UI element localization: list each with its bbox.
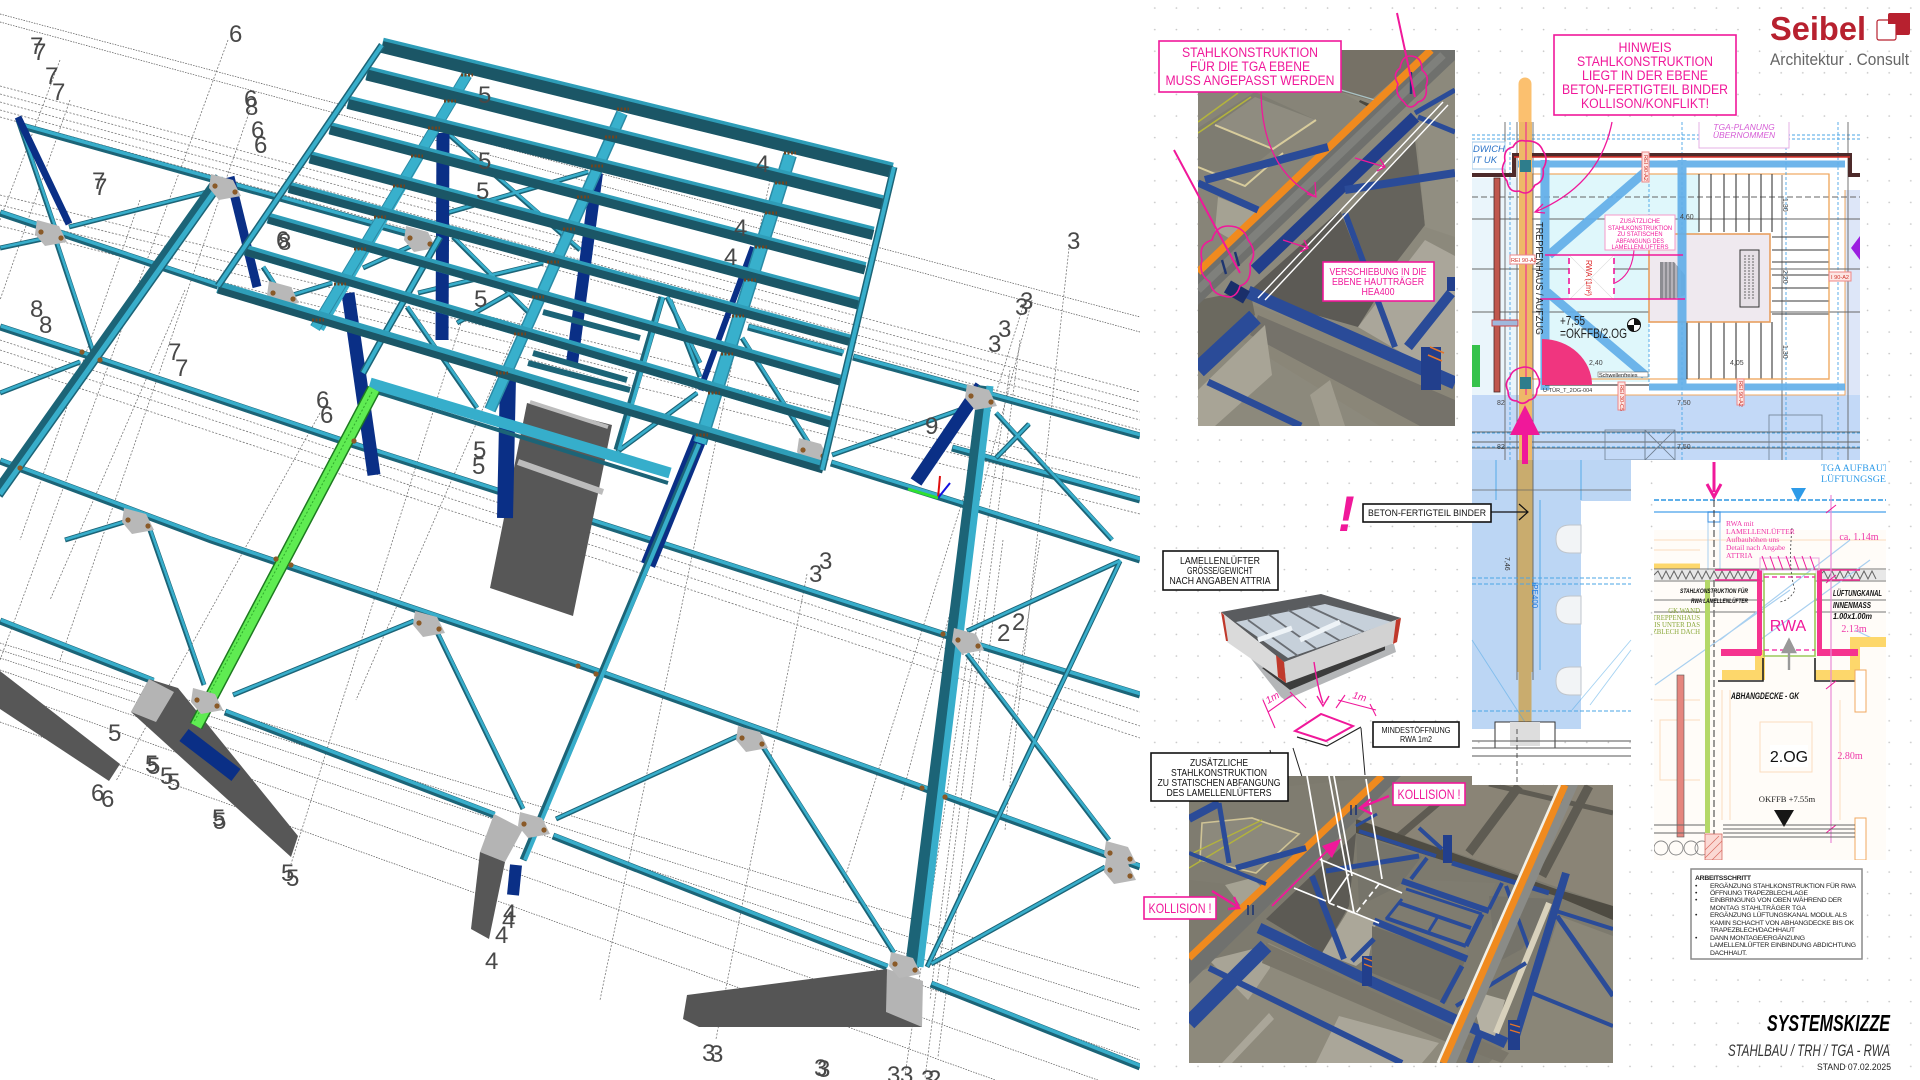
text block: Arbeitsschritt: • bbox=[1695, 912, 1698, 919]
shaft walls bbox=[1266, 833, 1356, 953]
callout: Beton-Fertigteil Binder: BETON-FERTIGTEIL BINDER bbox=[1368, 508, 1486, 519]
main rafters bbox=[0, 178, 990, 967]
pink arrow to binder bbox=[1515, 412, 1535, 464]
floor plan: stairwell: 2,40 bbox=[1589, 360, 1603, 367]
sandwich tag bbox=[1472, 142, 1505, 169]
text block: Arbeitsschritt: ÖFFNUNG TRAPEZBLECHLAGE bbox=[1710, 889, 1808, 897]
grid axis numbers: 8 bbox=[39, 312, 52, 339]
grid axis numbers: 3 bbox=[710, 1041, 723, 1068]
text block: Arbeitsschritt: • bbox=[1695, 890, 1698, 897]
gusset plates bbox=[17, 174, 1136, 978]
grid axis numbers: 5 bbox=[108, 720, 121, 747]
callout: Verschiebung: VERSCHIEBUNG IN DIE bbox=[1330, 266, 1426, 278]
logo: Seibel: Seibel bbox=[1770, 10, 1866, 47]
callout: Hinweis bbox=[1554, 35, 1736, 115]
section drawing RWA: RWA mit bbox=[1726, 519, 1755, 528]
grid axis numbers: 8 bbox=[30, 296, 43, 323]
callout: Mindestöffnung: MINDESTÖFFNUNG bbox=[1382, 725, 1451, 735]
floor plan: stairwell: RWA (1m²) bbox=[1584, 260, 1593, 296]
grid axis numbers: 5 bbox=[213, 808, 226, 835]
callout: Mindestöffnung bbox=[1373, 722, 1459, 747]
section drawing RWA: BIS UNTER DAS bbox=[1650, 622, 1700, 629]
render: top 3D view of steel in shaft bbox=[1174, 13, 1455, 426]
grid axis numbers: 4 bbox=[724, 244, 737, 271]
section drawing RWA: 2.80m bbox=[1837, 751, 1863, 762]
green highlighted member bbox=[194, 389, 374, 726]
grid axis numbers: 4 bbox=[502, 907, 515, 934]
lower plan: binder elevation bbox=[1472, 460, 1631, 784]
grid axis numbers: 5 bbox=[286, 865, 299, 892]
concrete core bbox=[490, 402, 612, 616]
text block: Arbeitsschritt: ERGÄNZUNG LÜFTUNGSKANAL MODUL ALS bbox=[1710, 911, 1847, 919]
section drawing RWA: Detail nach Angabe bbox=[1726, 543, 1786, 552]
callout: Zusätzliche Stahlkonstruktion (plan) bbox=[1605, 215, 1675, 251]
section drawing RWA: RWA LAMELLENLÜFTER bbox=[1691, 596, 1748, 605]
grid axis numbers: 7 bbox=[94, 174, 107, 201]
floor plan: stairwell: DWICH bbox=[1473, 143, 1505, 154]
text block: Arbeitsschritt: DANN MONTAGE/ERGÄNZUNG bbox=[1710, 934, 1805, 942]
truss lattice members bbox=[0, 120, 1120, 967]
floor plan: stairwell: 82 bbox=[1497, 444, 1505, 451]
lower plan boxes bbox=[1605, 415, 1822, 465]
sketch: minimum opening: 1m bbox=[1351, 690, 1368, 704]
section drawing RWA: 2.OG bbox=[1770, 749, 1808, 766]
walls bbox=[1472, 155, 1860, 175]
annotation clouds and arrows bbox=[1174, 13, 1427, 297]
floor plan: stairwell: +7,55 bbox=[1560, 313, 1585, 328]
callout: Zusätzliche Stahlkonstruktion: STAHLKONSTRUKTION bbox=[1171, 768, 1267, 779]
callout: Stahlkonstruktion TGA Ebene: FÜR DIE TGA EBENE bbox=[1190, 59, 1310, 74]
section drawing RWA: ABHANGDECKE - GK bbox=[1730, 691, 1800, 702]
plan labels: TREPPENHAUS / AUFZUG bbox=[1533, 222, 1544, 335]
sketch: minimum opening: 1m bbox=[1264, 690, 1282, 707]
section drawing RWA: 2.13m bbox=[1841, 624, 1867, 635]
floor plan: stairwell: 1,30 bbox=[1781, 198, 1788, 212]
section drawing RWA: OKFFB +7.55m bbox=[1759, 794, 1816, 804]
steel beam bbox=[1189, 776, 1401, 984]
grid axis numbers: 6 bbox=[320, 402, 333, 429]
blue columns bbox=[18, 117, 981, 565]
grid axis numbers: 5 bbox=[478, 148, 491, 175]
door swing bbox=[1542, 339, 1592, 385]
grid axis numbers: 3 bbox=[1015, 294, 1028, 321]
text block: Arbeitsschritt bbox=[1691, 869, 1862, 959]
callout: Kollision top bbox=[1393, 783, 1465, 805]
grid axis numbers: 5 bbox=[478, 82, 491, 109]
callout: Zusätzliche Stahlkonstruktion: ZU STATISCHEN ABFANGUNG bbox=[1158, 778, 1280, 789]
grid axis numbers: 4 bbox=[485, 948, 498, 975]
small room tags: REI 30-C5 bbox=[1618, 385, 1624, 411]
roof platform: purlins bbox=[218, 45, 894, 470]
shaft walls bbox=[1245, 210, 1375, 327]
floor plan: stairwell: 2,20 bbox=[1781, 270, 1788, 284]
callout: Hinweis: STAHLKONSTRUKTION bbox=[1577, 54, 1713, 69]
callout: Lamellenlüfter: GRÖSSE/GEWICHT bbox=[1187, 566, 1253, 577]
logo: Seibel: Architektur . Consult bbox=[1770, 50, 1909, 69]
grid axis numbers: 6 bbox=[91, 780, 104, 807]
callout: Zusätzliche Stahlkonstruktion (plan): ZUSÄTZLICHE bbox=[1620, 217, 1660, 225]
grid lines bbox=[1472, 122, 1860, 460]
text block: Arbeitsschritt: • bbox=[1695, 883, 1698, 890]
blue members bbox=[1189, 803, 1613, 1063]
floor plan: stairwell: 4,05 bbox=[1730, 360, 1744, 367]
grid axis numbers: 6 bbox=[244, 86, 257, 113]
grid axis numbers: 6 bbox=[251, 117, 264, 144]
section drawing RWA: ca. 1.14m bbox=[1839, 532, 1879, 543]
callout: Stahlkonstruktion TGA Ebene: MUSS ANGEPASST WERDEN bbox=[1166, 73, 1334, 88]
exclamation mark: ! bbox=[1338, 486, 1355, 542]
blue members bbox=[1198, 90, 1455, 426]
grid axis numbers: 5 bbox=[476, 178, 489, 205]
lower plan: binder elevation: IPE400 bbox=[1530, 582, 1539, 609]
small room tags: REI 90-A2 bbox=[1642, 155, 1648, 181]
grid axis numbers: 7 bbox=[92, 168, 105, 195]
steel beams bbox=[1518, 160, 1845, 390]
grid axis numbers: 7 bbox=[30, 33, 43, 60]
grid axis numbers: 8 bbox=[245, 94, 258, 121]
orange stripe right bbox=[1446, 785, 1578, 1063]
callout: Hinweis: LIEGT IN DER EBENE bbox=[1582, 68, 1708, 83]
callout: Kollision left: KOLLISION ! bbox=[1148, 900, 1212, 916]
pink frame and green duct bbox=[1721, 649, 1761, 656]
callout: Verschiebung: HEA400 bbox=[1362, 286, 1395, 298]
text block: Arbeitsschritt: ARBEITSSCHRITT bbox=[1695, 875, 1752, 882]
grid axis numbers: 6 bbox=[229, 21, 242, 48]
roof platform: secondary beams bbox=[315, 75, 790, 450]
date stamp: STAND 07.02.2025 bbox=[1817, 1062, 1891, 1073]
section drawing RWA: STAHLKONSTRUKTION FÜR bbox=[1680, 586, 1748, 595]
product image: louvre ventilator bbox=[1221, 594, 1401, 700]
callout: Verschiebung bbox=[1323, 262, 1434, 301]
callout: Zusätzliche Stahlkonstruktion: DES LAMELLENLÜFTERS bbox=[1166, 787, 1272, 799]
section drawing RWA: Aufbauhöhen uns bbox=[1726, 535, 1779, 544]
floor plan: stairwell bbox=[1472, 84, 1860, 465]
callout: Hinweis: BETON-FERTIGTEIL BINDER bbox=[1562, 82, 1728, 97]
callout: Hinweis: KOLLISON/KONFLIKT! bbox=[1581, 96, 1709, 111]
grid axis numbers: 7 bbox=[33, 39, 46, 66]
callout: Kollision left bbox=[1144, 897, 1216, 919]
callout: Zusätzliche Stahlkonstruktion: ZUSÄTZLICHE bbox=[1190, 757, 1248, 769]
grid axis numbers: 3 bbox=[1067, 228, 1080, 255]
grid axis numbers: 7 bbox=[52, 79, 65, 106]
callout: Hinweis: HINWEIS bbox=[1618, 40, 1672, 55]
callout: Zusätzliche Stahlkonstruktion (plan): ABFANGUNG DES bbox=[1616, 238, 1664, 245]
grid axis numbers: 4 bbox=[503, 900, 516, 927]
grid axis numbers: 5 bbox=[212, 805, 225, 832]
grid axis numbers: 5 bbox=[472, 453, 485, 480]
grid axis lines bbox=[0, 14, 1140, 1080]
grid axis numbers: 4 bbox=[734, 215, 747, 242]
grid axis numbers: 5 bbox=[281, 860, 294, 887]
grid axis numbers: 5 bbox=[473, 437, 486, 464]
grid axis numbers: 5 bbox=[145, 751, 158, 778]
lower plan: binder elevation: 7,46 bbox=[1503, 557, 1510, 571]
TGA-Planung tag bbox=[1698, 122, 1790, 148]
section drawing RWA: TRAPEZBLECH DACH bbox=[1631, 629, 1700, 636]
text block: Arbeitsschritt: TRAPEZBLECH/DACHHAUT bbox=[1710, 927, 1795, 934]
callout: Zusätzliche Stahlkonstruktion bbox=[1151, 753, 1288, 801]
grid axis numbers: 7 bbox=[168, 339, 181, 366]
section drawing RWA bbox=[1654, 460, 1886, 860]
section drawing RWA: ATTRIA bbox=[1726, 551, 1753, 560]
floor plan: stairwell: Schwellenfreies bbox=[1599, 373, 1638, 379]
render: lower 3D view with RWA wireframe bbox=[1189, 776, 1613, 1063]
floor plan: stairwell: 1,30 bbox=[1781, 345, 1788, 359]
white wireframe bbox=[1294, 776, 1402, 923]
section drawing RWA: LÜFTUNGSGE bbox=[1821, 473, 1886, 485]
text block: Arbeitsschritt: ERGÄNZUNG STAHLKONSTRUKTION FÜR RWA bbox=[1710, 882, 1856, 890]
text block: Arbeitsschritt: DACHHAUT. bbox=[1710, 950, 1747, 957]
callout: Verschiebung: EBENE HAUTTRÄGER bbox=[1332, 276, 1424, 288]
floor plan: stairwell: =OKFFB/2.OG bbox=[1560, 325, 1627, 341]
text block: Arbeitsschritt: LAMELLENLÜFTER EINBINDUNG ABDICHTUNG bbox=[1710, 941, 1856, 949]
floor plan: stairwell: IT UK bbox=[1473, 154, 1498, 165]
grid axis numbers: 3 bbox=[702, 1040, 715, 1067]
floor plan: stairwell: U-TÜR_T_2OG-004 bbox=[1543, 387, 1592, 394]
logo: Seibel bbox=[1770, 10, 1910, 69]
grid axis numbers: 6 bbox=[101, 786, 114, 813]
roof surface bbox=[1356, 776, 1613, 906]
grid axis numbers: 5 bbox=[474, 286, 487, 313]
floor plan: stairwell: TGA-PLANUNG bbox=[1713, 122, 1775, 132]
grid axis numbers: 5 bbox=[167, 769, 180, 796]
grid axis numbers: 2 bbox=[997, 620, 1010, 647]
floor plan: stairwell: 7,50 bbox=[1677, 444, 1691, 451]
grid axis numbers: 5 bbox=[160, 763, 173, 790]
text block: Arbeitsschritt: • bbox=[1695, 935, 1698, 942]
text block: Arbeitsschritt: EINBRINGUNG VON OBEN WÄHREND DER bbox=[1710, 896, 1842, 904]
opening RWA bbox=[1569, 255, 1614, 300]
concrete supports bbox=[0, 671, 923, 1027]
yellow insulation bbox=[1654, 566, 1886, 675]
grid axis numbers: 2 bbox=[1012, 609, 1025, 636]
text block: Arbeitsschritt: KAMIN SCHACHT VON ABHANGDECKE BIS OK bbox=[1710, 920, 1854, 927]
callout: Lamellenlüfter: NACH ANGABEN ATTRIA bbox=[1170, 576, 1271, 587]
section drawing RWA: RWA bbox=[1770, 618, 1807, 635]
grid axis numbers: 3 bbox=[988, 331, 1001, 358]
callout: Lamellenlüfter bbox=[1163, 551, 1278, 590]
callout: Beton-Fertigteil Binder bbox=[1363, 504, 1528, 522]
grid axis numbers: 5 bbox=[147, 753, 160, 780]
grid axis numbers: 6 bbox=[276, 227, 289, 254]
upper left floor and curb bbox=[1189, 776, 1390, 890]
axis triad bbox=[908, 476, 950, 498]
grid axis numbers: 4 bbox=[495, 922, 508, 949]
small room tags bbox=[1510, 152, 1851, 411]
small room tags: REI 90-A2 bbox=[1511, 258, 1537, 264]
grid axis numbers bbox=[30, 21, 1080, 1080]
sketch: minimum opening bbox=[1263, 662, 1376, 780]
callout: Mindestöffnung: RWA 1m2 bbox=[1400, 734, 1432, 744]
text block: Arbeitsschritt: MONTAG STAHLTRÄGER TGA bbox=[1710, 904, 1806, 912]
callout: Stahlkonstruktion TGA Ebene: STAHLKONSTRUKTION bbox=[1182, 45, 1318, 60]
section drawing RWA: LÜFTUNGKANAL bbox=[1833, 589, 1882, 598]
text block: Arbeitsschritt: • bbox=[1695, 897, 1698, 904]
grid axis numbers: 3 bbox=[998, 316, 1011, 343]
small room tags: REI 90-A2 bbox=[1737, 381, 1743, 407]
grid axis numbers: 6 bbox=[316, 387, 329, 414]
floor plan: stairwell: 7,50 bbox=[1677, 400, 1691, 407]
section labels: TGA AUFBAUT bbox=[1821, 463, 1889, 474]
callout: Stahlkonstruktion TGA Ebene bbox=[1159, 41, 1341, 92]
grid axis numbers: 3 bbox=[819, 548, 832, 575]
section drawing RWA: LAMELLENLÜFTER bbox=[1726, 527, 1795, 536]
floor plan: stairwell: 82 bbox=[1497, 400, 1505, 407]
section drawing RWA: TREPPENHAUS bbox=[1652, 615, 1700, 622]
orange binder column bbox=[1519, 122, 1532, 460]
callout: Zusätzliche Stahlkonstruktion (plan): ZU STATISCHEN bbox=[1618, 231, 1663, 238]
stair treads bbox=[1687, 174, 1829, 379]
3D steel structure model bbox=[0, 14, 1141, 1080]
floor plan: stairwell: 4,60 bbox=[1680, 214, 1694, 221]
grid axis numbers: 9 bbox=[925, 413, 938, 440]
grid axis numbers: 7 bbox=[45, 63, 58, 90]
callout: Zusätzliche Stahlkonstruktion (plan): STAHLKONSTRUKTION bbox=[1608, 225, 1672, 232]
grid axis numbers: 7 bbox=[175, 355, 188, 382]
callout: Kollision top: KOLLISION ! bbox=[1398, 786, 1460, 802]
callout: Lamellenlüfter: LAMELLENLÜFTER bbox=[1180, 556, 1260, 567]
grid axis numbers: 4 bbox=[756, 151, 769, 178]
grid axis numbers: 6 bbox=[254, 132, 267, 159]
walls bbox=[1705, 580, 1710, 833]
grid axis numbers: 8 bbox=[278, 229, 291, 256]
section drawing RWA: 1.00x1.00m bbox=[1833, 612, 1872, 621]
floor plan: stairwell: ÜBERNOMMEN bbox=[1713, 130, 1776, 140]
section drawing RWA: INNENMASS bbox=[1833, 601, 1872, 610]
truss chords bbox=[0, 125, 1141, 1067]
callout: Zusätzliche Stahlkonstruktion (plan): LAMELLENLÜFTERS bbox=[1612, 243, 1668, 251]
roof build-up bbox=[1654, 570, 1886, 580]
grid axis numbers: 3 bbox=[1020, 288, 1033, 315]
steel beam and orange stripe bbox=[1198, 50, 1455, 305]
section drawing RWA: GK WAND bbox=[1668, 608, 1700, 615]
grid axis numbers: 3 bbox=[809, 561, 822, 588]
small room tags: I 90-A2 bbox=[1831, 275, 1849, 281]
plan clouds and leader bbox=[1502, 122, 1634, 403]
